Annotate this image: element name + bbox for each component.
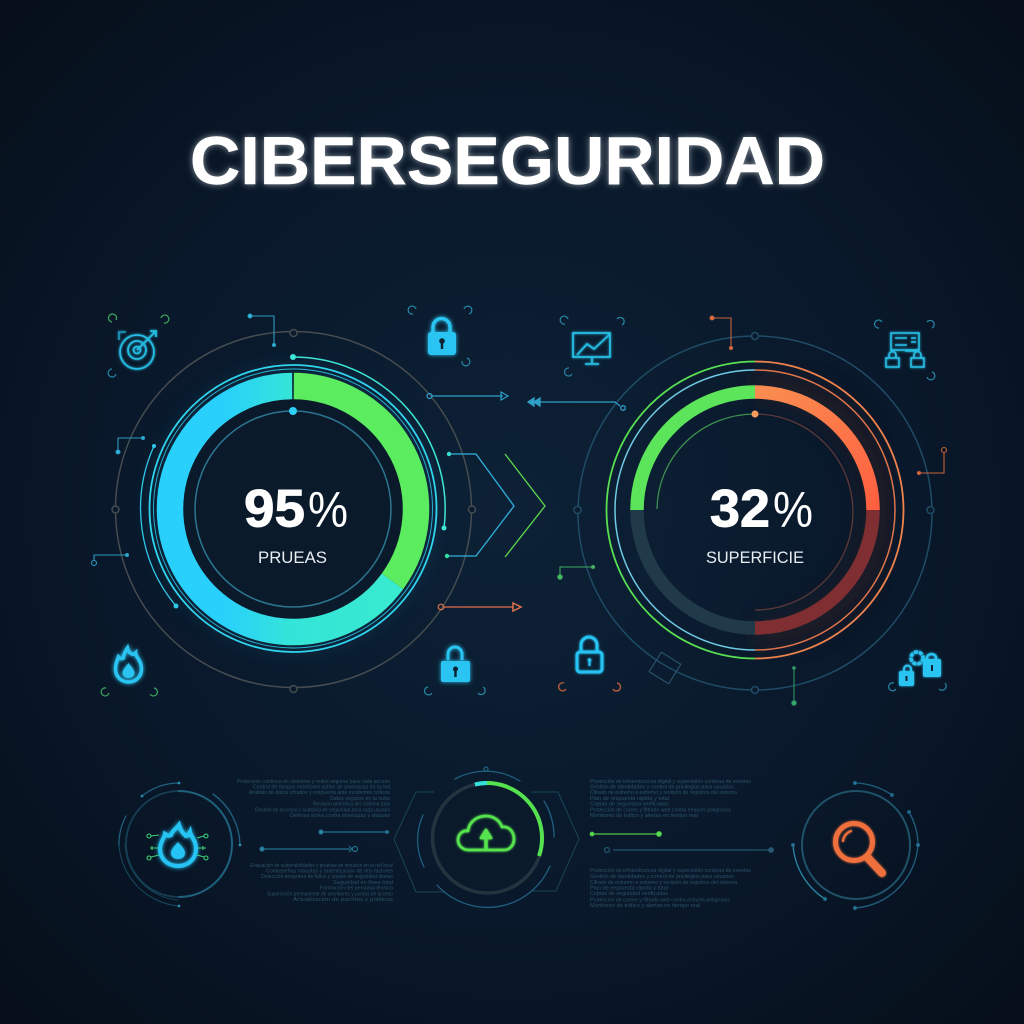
icon brackets: monitor: [560, 316, 624, 376]
icon: network locks: [886, 333, 924, 367]
micro text: block 2: Evaluación de vulnerabilidades y pruebas de intrusión en la red local: [250, 863, 393, 869]
dark red haze: [755, 385, 880, 635]
micro text: block 1: Gestión de accesos y auditoría de seguridad para cada usuario: [255, 808, 390, 814]
micro text: block 2: Supervisión permanente de servidores y puntos de acceso: [267, 892, 393, 898]
rotated square: [649, 652, 681, 684]
accent arcs: [418, 767, 554, 907]
micro text: block 2: Seguridad en línea total: [333, 880, 393, 886]
hexagon frame: [394, 792, 579, 892]
micro text: block 1: Control de riesgos monitoreo activo de amenazas en la red: [253, 784, 390, 790]
icon brackets: flame: [101, 688, 157, 696]
icon: padlock bottom: [441, 647, 470, 682]
icon: padlock top: [428, 318, 456, 355]
progress arc start: [475, 783, 487, 784]
chevron: green: [505, 454, 545, 557]
rings: green and orange: [606, 362, 904, 658]
badge ring: [802, 791, 910, 899]
micro text: block 3: Gestión de identidades y control de privilegios para usuarios: [590, 784, 734, 790]
inner thin ring: [657, 414, 853, 610]
micro text: block 4: [590, 868, 751, 909]
panel: right gauge: [574, 332, 934, 694]
cyan rings: [141, 354, 447, 652]
icon: padlock outline: [577, 637, 602, 672]
micro text: block 2: Contraseñas robustas y autenticación de dos factores: [266, 868, 393, 874]
circuit traces: [147, 834, 208, 860]
title: CIBERSEGURIDAD: [190, 123, 825, 199]
micro text: block 2: Actualización de parches y políticas: [293, 897, 393, 903]
label: PRUEAS: PRUEAS: [258, 548, 327, 567]
connectors: left gauge: [92, 314, 276, 566]
panel: search badge: [792, 782, 920, 910]
micro text: block 1: Defensa activa contra amenazas y ataques: [290, 813, 390, 819]
micro text: block 3: Monitoreo de tráfico y alertas en tiempo real: [590, 813, 698, 819]
icon: flame with drop: [160, 825, 196, 866]
micro text: block 2: [250, 863, 393, 903]
donut: test segments: [170, 386, 416, 632]
icon: flame: [116, 648, 142, 682]
value: 32%: %: [773, 482, 813, 538]
value: 32%: 32: [710, 480, 770, 538]
micro text: block 1: Revisión periódica del sistema total: [313, 802, 390, 808]
panel: left gauge: [112, 330, 476, 692]
icon: magnifying glass: [836, 824, 882, 873]
value: 95%: [244, 480, 348, 538]
micro text: block 1: Datos seguros en la nube: [330, 796, 390, 802]
badge rings: [119, 782, 241, 907]
icon: target: [119, 331, 156, 369]
micro text: block 3: [590, 779, 751, 819]
micro text: block 3: Copias de seguridad verificadas: [590, 802, 669, 808]
donut glow backdrop: [158, 374, 428, 644]
icon: cloud upload: [458, 816, 514, 850]
arrow: orange: [438, 603, 521, 611]
icon brackets: padlock cluster: [889, 683, 946, 691]
micro text: block 3: Protección de infraestructura digital y supervisión continua de eventos: [590, 779, 751, 785]
micro text: block 4: Plan de respuesta rápida y total: [590, 886, 668, 892]
micro text: block 1: Análisis de datos cifrados y respuesta ante incidentes críticos: [249, 790, 390, 796]
micro text: block 4: Gestión de identidades y control de privilegios para usuarios: [590, 874, 734, 880]
chevron: blue connector: [445, 452, 514, 558]
icon: monitor: [573, 333, 610, 364]
micro text: block 4: Protección de correo y filtrado web contra enlaces peligrosos: [590, 898, 730, 904]
micro text: block 3: Cifrado de extremo a extremo y revisión de registros del sistema: [590, 790, 738, 796]
value: 32%: [710, 480, 813, 538]
connectors: right gauge: [558, 316, 946, 705]
icon brackets: target: [108, 314, 169, 377]
inner dark disc: [183, 399, 403, 619]
micro text: block 4: Monitoreo de tráfico y alertas en tiempo real: [590, 903, 700, 909]
micro text: block 4: Protección de infraestructura digital y supervisión continua de eventos: [590, 868, 751, 874]
micro text: block 4: Cifrado de extremo a extremo y revisión de registros del sistema: [590, 880, 738, 886]
arrow: pointing left: [528, 398, 625, 410]
icon brackets: padlock top: [408, 306, 472, 366]
inner ring dot: [752, 410, 758, 418]
micro text: block 3: Protección de correo y filtrado web contra enlaces peligrosos: [590, 808, 731, 814]
icon: padlock cluster: [899, 652, 941, 686]
micro text: block 1: [237, 779, 390, 819]
value: 95%: 95: [244, 480, 305, 538]
connector lines: right centre: [590, 832, 773, 852]
outer ring with nodes: [574, 332, 934, 694]
badge ring: [432, 783, 542, 893]
connector lines: left centre: [260, 830, 388, 852]
micro text: block 1: Protección continua de sistemas y redes seguras para cada acceso: [237, 779, 390, 785]
micro text: block 4: Copias de seguridad verificadas: [590, 891, 668, 897]
accent arcs: [792, 782, 920, 910]
micro text: block 2: Formación del personal técnico: [320, 886, 393, 892]
inner ring dot: [289, 407, 297, 415]
value: 95%: %: [308, 482, 348, 538]
arrow: top right of left gauge: [427, 392, 508, 400]
icon brackets: padlock bottom: [425, 687, 485, 695]
outer ring with nodes: [112, 330, 476, 692]
icon brackets: network locks: [875, 320, 935, 380]
donut: surface segments: [637, 392, 873, 628]
icon brackets: padlock outline: [559, 683, 620, 691]
panel: flame badge: [119, 782, 241, 907]
panel: cloud badge: [394, 767, 579, 907]
micro text: block 3: Plan de respuesta rápida y total: [590, 796, 669, 802]
progress arc: [475, 783, 542, 856]
label: SUPERFICIE: SUPERFICIE: [706, 548, 804, 567]
micro text: block 2: Detección temprana de fallos y copias de seguridad diarias: [261, 874, 393, 880]
inner thin ring: [195, 411, 391, 607]
